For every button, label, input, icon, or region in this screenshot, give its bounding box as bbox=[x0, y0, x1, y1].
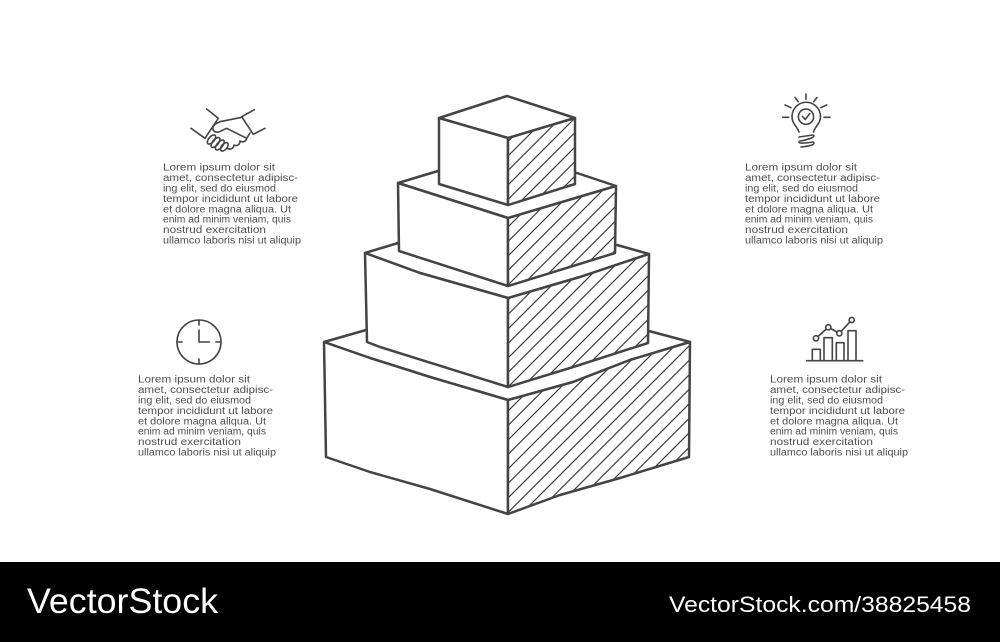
text block: bottom right bbox=[770, 375, 909, 459]
stacked pyramid diagram bbox=[324, 96, 690, 514]
text block: top right: enim ad minim veniam, quis bbox=[745, 215, 873, 226]
text block: bottom left: Lorem ipsum dolor sit bbox=[138, 375, 250, 386]
text block: top left: enim ad minim veniam, quis bbox=[163, 215, 291, 226]
tier 2: upper middle box bbox=[398, 171, 616, 286]
text block: bottom right: enim ad minim veniam, quis bbox=[770, 427, 898, 438]
text block: bottom right: amet, consectetur adipisc- bbox=[770, 385, 905, 396]
text block: top right: nostrud exercitation bbox=[745, 225, 848, 236]
footer image id: VectorStock.com/38825458 bbox=[669, 592, 971, 617]
text block: top left: ing elit, sed do eiusmod bbox=[163, 184, 276, 194]
text block: bottom right: Lorem ipsum dolor sit bbox=[770, 375, 882, 386]
text block: top left: amet, consectetur adipisc- bbox=[163, 173, 298, 184]
text block: top right: tempor incididunt ut labore bbox=[745, 194, 881, 205]
icon: clock bbox=[177, 320, 221, 364]
tier 4: bottom box bbox=[324, 330, 690, 514]
tier 1: top box bbox=[439, 96, 575, 205]
text block: bottom right: tempor incididunt ut labore bbox=[770, 406, 906, 417]
text block: bottom left bbox=[138, 375, 277, 459]
text block: top right: ing elit, sed do eiusmod bbox=[745, 184, 858, 194]
text block: top left: et dolore magna aliqua. Ut bbox=[163, 204, 291, 215]
icon: handshake bbox=[191, 109, 265, 152]
icon: bar chart with trend line bbox=[807, 317, 863, 361]
text block: bottom left: ing elit, sed do eiusmod bbox=[138, 396, 251, 406]
text block: top right: et dolore magna aliqua. Ut bbox=[745, 204, 873, 215]
text block: bottom left: enim ad minim veniam, quis bbox=[138, 427, 266, 438]
text block: top left: tempor incididunt ut labore bbox=[163, 194, 299, 205]
text block: bottom left: tempor incididunt ut labore bbox=[138, 406, 274, 417]
text block: bottom right: ullamco laboris nisi ut aliquip bbox=[770, 448, 909, 459]
text block: bottom left: amet, consectetur adipisc- bbox=[138, 385, 273, 396]
footer logo: VectorStock bbox=[27, 582, 219, 621]
tier 3: lower middle box bbox=[365, 243, 649, 387]
text block: top right bbox=[745, 163, 884, 247]
footer bar bbox=[0, 562, 1000, 642]
text block: bottom left: nostrud exercitation bbox=[138, 437, 241, 448]
text block: bottom right: et dolore magna aliqua. Ut bbox=[770, 416, 898, 427]
icon: light bulb with check bbox=[783, 94, 830, 147]
text block: top left: ullamco laboris nisi ut aliquip bbox=[163, 236, 302, 247]
text block: top right: ullamco laboris nisi ut aliquip bbox=[745, 236, 884, 247]
text block: bottom right: ing elit, sed do eiusmod bbox=[770, 396, 883, 406]
text block: bottom left: et dolore magna aliqua. Ut bbox=[138, 416, 266, 427]
text block: top left bbox=[163, 163, 302, 247]
text block: bottom left: ullamco laboris nisi ut aliquip bbox=[138, 448, 277, 459]
text block: top right: amet, consectetur adipisc- bbox=[745, 173, 880, 184]
text block: top left: Lorem ipsum dolor sit bbox=[163, 163, 275, 174]
text block: top left: nostrud exercitation bbox=[163, 225, 266, 236]
text block: bottom right: nostrud exercitation bbox=[770, 437, 873, 448]
text block: top right: Lorem ipsum dolor sit bbox=[745, 163, 857, 174]
